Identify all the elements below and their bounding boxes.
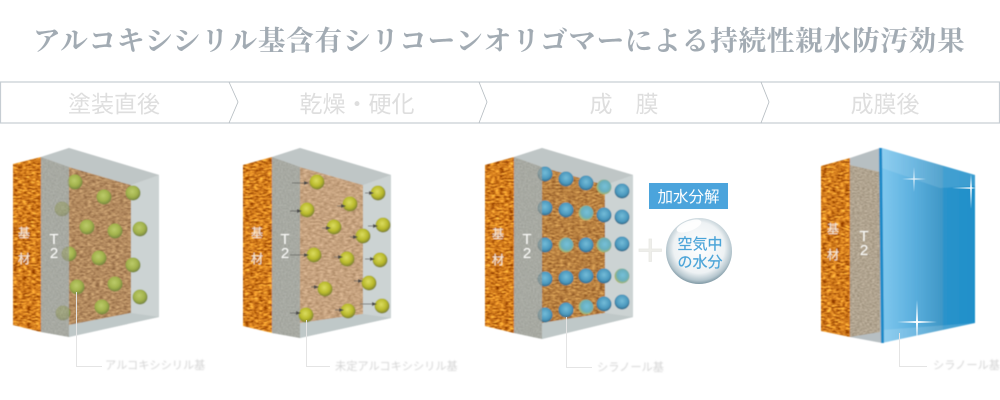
step: film forming: 成 膜 xyxy=(590,91,658,117)
icon: water droplet with airborne moisture xyxy=(666,217,732,284)
step: drying and curing: 乾燥・硬化 xyxy=(300,91,414,117)
icon: water droplet with airborne moisture: 空気中 xyxy=(677,236,723,253)
spheres: unreacted alkoxysilyl groups xyxy=(298,174,390,322)
panel: block 4 after film forming: 基 xyxy=(827,222,839,236)
panel: block 1 after coating xyxy=(13,148,159,337)
panel: block 3 film forming: 材 xyxy=(492,253,504,267)
panel: block 1 after coating: 材 xyxy=(18,252,30,266)
panel: block 2 drying and curing: 基 xyxy=(251,226,263,240)
substrate layer xyxy=(13,157,41,332)
step: immediately after coating: 塗装直後 xyxy=(68,91,160,117)
label: hydrolysis xyxy=(649,183,728,209)
process step bar xyxy=(0,82,1000,123)
icon: sparkles xyxy=(897,167,976,344)
icon: water droplet with airborne moisture: の水分 xyxy=(677,254,723,271)
panel: block 1 after coating: 基 xyxy=(18,226,30,240)
callout: alkoxysilyl group xyxy=(76,292,205,372)
panel: block 4 after film forming: 2 xyxy=(860,242,868,259)
arrows: migration to the surface xyxy=(290,181,378,315)
callout: silanol group: シラノール基 xyxy=(597,361,664,374)
step: after film forming: 成膜後 xyxy=(850,91,920,117)
callout: unreacted alkoxysilyl group: 未定アルコキシシリル基 xyxy=(335,360,458,373)
label: hydrolysis: 加水分解 xyxy=(657,188,720,206)
substrate layer xyxy=(821,158,850,337)
callout: silanol group on film: シラノール基 xyxy=(933,359,1000,372)
panel: block 2 drying and curing: 材 xyxy=(251,252,263,266)
panel: block 3 film forming: 基 xyxy=(492,227,504,241)
icon: plus xyxy=(639,239,662,262)
spheres: alkoxysilyl groups xyxy=(54,174,148,320)
substrate layer xyxy=(243,157,272,333)
T2 layer label: T xyxy=(49,231,59,248)
panel: block 3 film forming xyxy=(485,148,633,339)
T2 layer label: T xyxy=(859,228,869,245)
T2 layer label: T xyxy=(280,231,290,248)
panel: block 4 after film forming xyxy=(821,148,975,343)
panel: block 1 after coating: 2 xyxy=(50,245,58,262)
T2 layer label: T xyxy=(522,231,532,248)
callout: alkoxysilyl group: アルコキシシリル基 xyxy=(105,359,205,372)
callout: silanol group xyxy=(566,317,664,374)
panel: block 2 drying and curing xyxy=(243,148,391,338)
substrate layer xyxy=(485,157,514,333)
panel: block 4 after film forming: 材 xyxy=(827,248,839,262)
title: アルコキシシリル基含有シリコーンオリゴマーによる持続性親水防汚効果 xyxy=(33,25,966,56)
spheres: silanol groups xyxy=(538,166,630,322)
panel: block 3 film forming: 2 xyxy=(523,245,531,262)
hydrophilic film xyxy=(882,148,975,343)
callout: silanol group on film xyxy=(900,333,1000,372)
callout: unreacted alkoxysilyl group xyxy=(306,320,458,373)
panel: block 2 drying and curing: 2 xyxy=(281,245,289,262)
